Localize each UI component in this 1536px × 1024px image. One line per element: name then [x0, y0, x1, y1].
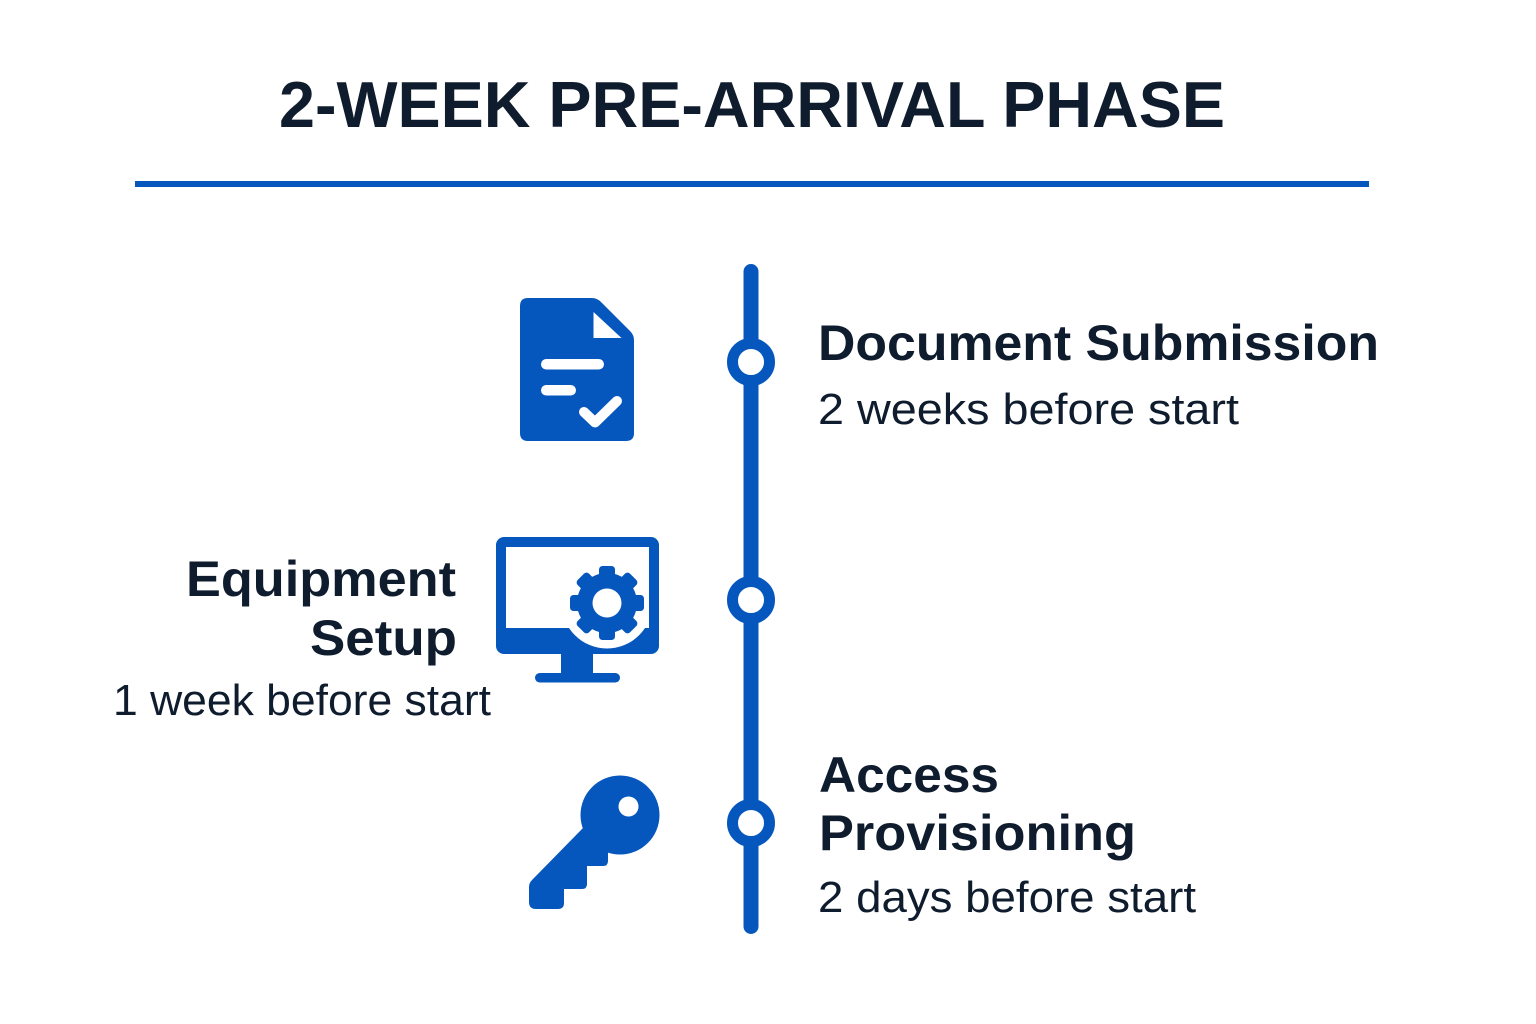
- step 1 text: document submission: [818, 315, 1379, 434]
- timeline node: equipment setup: [732, 582, 770, 618]
- step 1 text: document submission: Document Submission: [818, 315, 1379, 371]
- step 3 text: access provisioning: Access: [819, 747, 999, 803]
- timeline node: access provisioning: [732, 804, 770, 842]
- icon: key: [529, 776, 660, 909]
- timeline: vertical line with three nodes: [732, 264, 770, 934]
- step 1 text: document submission: 2 weeks before start: [818, 385, 1239, 434]
- step 2 text: equipment setup: Equipment: [186, 551, 456, 607]
- step 2 text: equipment setup: 1 week before start: [113, 676, 491, 725]
- icon: document with checkmark: [520, 298, 634, 441]
- title: 2-WEEK PRE-ARRIVAL PHASE: [279, 68, 1225, 141]
- timeline node: document submission: [732, 344, 770, 380]
- step 3 text: access provisioning: [818, 747, 1196, 922]
- step 2 text: equipment setup: Setup: [310, 610, 457, 666]
- step 3 text: access provisioning: Provisioning: [819, 805, 1136, 861]
- step 2 text: equipment setup: [113, 551, 491, 725]
- icon: monitor with gear: [496, 537, 659, 682]
- step 3 text: access provisioning: 2 days before start: [818, 873, 1196, 922]
